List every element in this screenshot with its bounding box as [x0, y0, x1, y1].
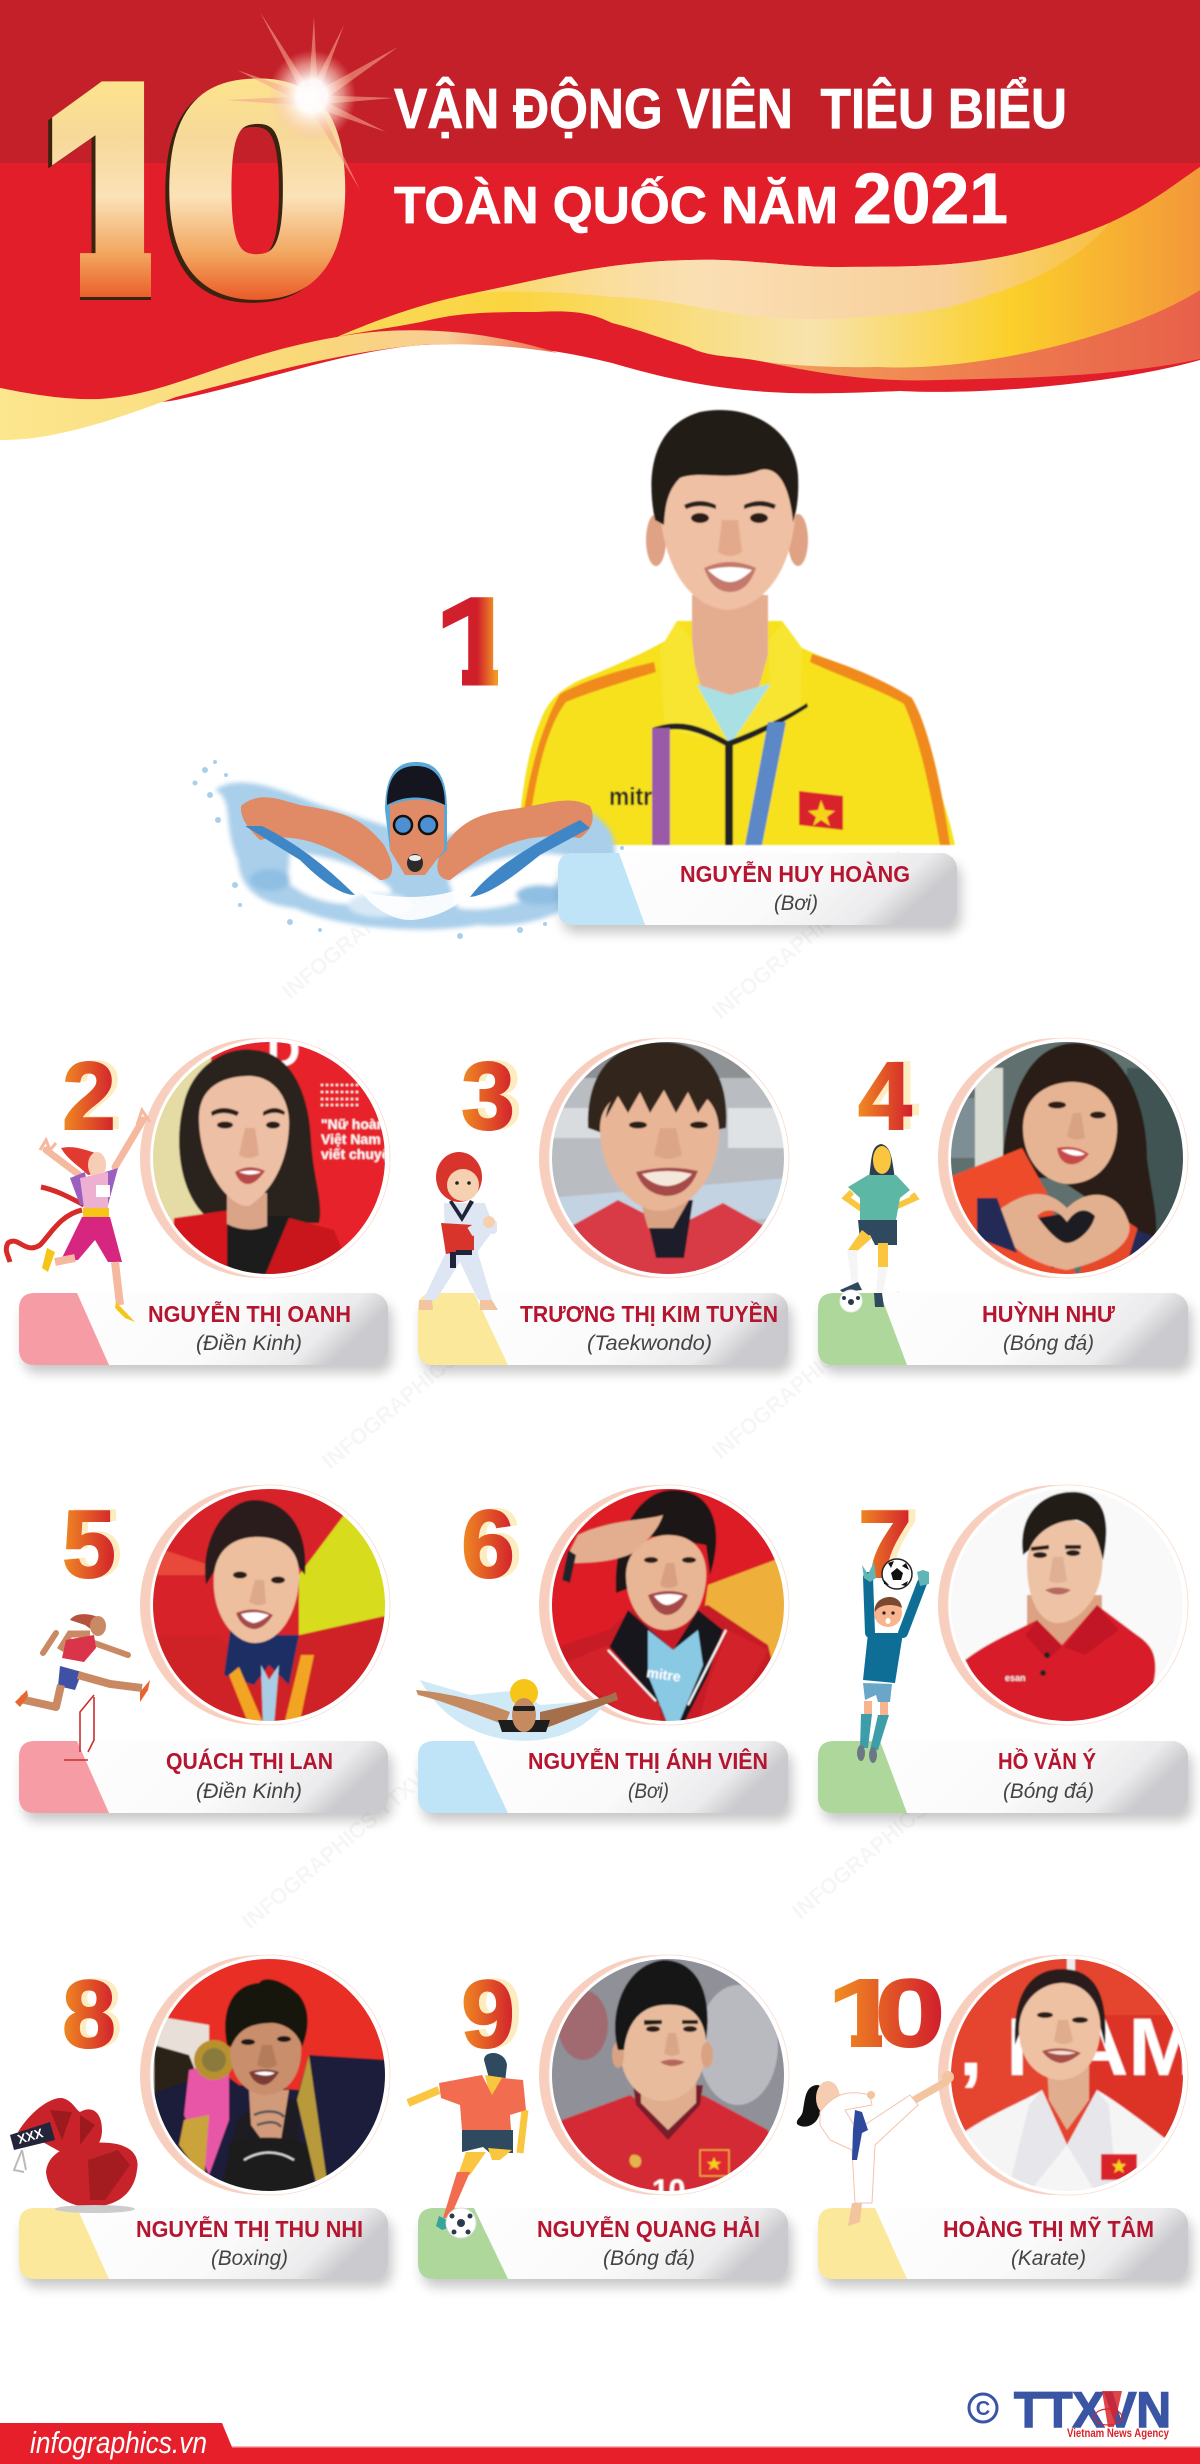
- athlete 4: Huỳnh Như: [818, 1038, 1192, 1373]
- name plate: HUỲNH NHƯ: [982, 1300, 1116, 1327]
- portrait: Nguyễn Thị Ánh Viên: mitre: [646, 1664, 682, 1685]
- number 5: 5: [62, 1491, 116, 1598]
- portrait: Quách Thị Lan: [140, 1485, 390, 1725]
- icon: female runner: [6, 1110, 150, 1322]
- portrait: Nguyễn Thị Ánh Viên: [539, 1485, 789, 1725]
- name plate: (Bóng đá): [1003, 1780, 1094, 1803]
- athlete 2: Nguyễn Thị Oanh: [6, 1024, 398, 1373]
- number 9: 9: [461, 1961, 515, 2068]
- portrait: Hồ Văn Ý: esan: [1005, 1673, 1026, 1683]
- portrait: Nguyễn Thị Oanh: "Nữ hoàng: [321, 1116, 394, 1132]
- name plate: [558, 853, 961, 933]
- text: INFOGRAPHICS TTXVN: [787, 1746, 992, 1924]
- number 4: 4: [865, 1042, 919, 1149]
- header banner: [0, 0, 1200, 440]
- icon: taekwondo athlete: [419, 1152, 498, 1310]
- athlete 1: Nguyễn Huy Hoàng: [192, 410, 961, 939]
- portrait: Nguyễn Quang Hải: 10: [652, 2174, 685, 2207]
- portrait: Trương Thị Kim Tuyền: [539, 1038, 789, 1278]
- name plate: (Boxing): [211, 2247, 288, 2270]
- athlete 3: Trương Thị Kim Tuyền: [418, 1038, 792, 1373]
- icon: butterfly swimmer: [192, 760, 624, 939]
- portrait: Hồ Văn Ý: [938, 1485, 1188, 1725]
- golden ribbon: [337, 167, 1200, 367]
- portrait: Nguyễn Huy Hoàng: mitr: [609, 783, 652, 811]
- footer: infographics.vn: [30, 2425, 207, 2460]
- icon: star burst: [225, 12, 398, 190]
- athlete 6: Nguyễn Thị Ánh Viên: [416, 1485, 792, 1821]
- peach ribbon highlight: [474, 223, 1109, 319]
- athlete 7: Hồ Văn Ý: [818, 1485, 1192, 1821]
- number 2: 2: [68, 1042, 122, 1149]
- portrait: Huỳnh Như: [938, 1038, 1188, 1278]
- portrait: Nguyễn Thị Oanh: viết chuyện: [321, 1146, 398, 1162]
- text: INFOGRAPHICS TTXVN: [317, 1296, 522, 1474]
- number 10: 0: [875, 1960, 945, 2067]
- name plate: TRƯƠNG THỊ KIM TUYỀN: [520, 1300, 778, 1327]
- portrait: Hoàng Thị Mỹ Tâm: , NAM: [959, 2002, 1199, 2093]
- portrait: Nguyễn Thị Oanh: Việt Nam v: [321, 1131, 393, 1147]
- text: INFOGRAPHICS TTXVN: [707, 1286, 912, 1464]
- title: VẬN ĐỘNG VIÊN TIÊU BIỂU: [394, 76, 1067, 141]
- portrait: Nguyễn Quang Hải: [539, 1955, 789, 2207]
- logo: TTXVN copyright: C: [976, 2398, 990, 2420]
- name plate: [19, 1293, 392, 1373]
- banner red background: [0, 0, 1200, 404]
- name plate: HỒ VĂN Ý: [998, 1747, 1096, 1774]
- name plate: [19, 2208, 392, 2287]
- icon: boxing gloves: [10, 2098, 138, 2213]
- text: INFOGRAPHICS TTXVN: [237, 1756, 442, 1934]
- portrait: Nguyễn Thị Oanh: D: [267, 1024, 300, 1076]
- portrait: Nguyễn Thị Thu Nhi: [140, 1955, 390, 2195]
- text: INFOGRAPHICS TTXVN: [707, 846, 912, 1024]
- name plate: NGUYỄN HUY HOÀNG: [680, 859, 910, 887]
- number 3: 3: [461, 1043, 515, 1150]
- icon: karate kick: [797, 2071, 954, 2226]
- name plate: (Taekwondo): [587, 1332, 712, 1355]
- big number 10: 1: [40, 26, 186, 353]
- portrait: Nguyễn Thị Oanh: [140, 1024, 398, 1278]
- name plate: (Bóng đá): [603, 2247, 695, 2270]
- name plate: [818, 1741, 1192, 1821]
- icon: hurdler: [15, 1614, 150, 1760]
- name plate: NGUYỄN THỊ THU NHI: [136, 2214, 363, 2242]
- logo: TTXVN copyright: Vietnam News Agency: [1067, 2426, 1169, 2440]
- number 7: 7: [865, 1490, 919, 1597]
- title: 2021: [853, 160, 1008, 239]
- athlete 5: Quách Thị Lan: [15, 1485, 392, 1821]
- logo: TTXVN copyright: TTXVN: [1014, 2382, 1171, 2438]
- name plate: NGUYỄN THỊ ÁNH VIÊN: [528, 1746, 768, 1774]
- icon: woman footballer: [840, 1144, 915, 1312]
- athlete 9: Nguyễn Quang Hải: [408, 1955, 792, 2287]
- number 10: [834, 1978, 942, 2048]
- footer: [0, 2423, 1200, 2464]
- coral ribbon band: [765, 275, 1200, 380]
- yellow ribbon left: [0, 330, 558, 440]
- name plate: NGUYỄN THỊ OANH: [148, 1299, 351, 1327]
- name plate: (Karate): [1011, 2247, 1086, 2270]
- icon: footballer: [408, 2053, 526, 2238]
- number 6: 6: [461, 1491, 515, 1598]
- number 8: 8: [62, 1961, 116, 2068]
- number 4: 4: [858, 1043, 912, 1150]
- icon: goalkeeper: [857, 1559, 929, 1763]
- number 5: 5: [68, 1490, 122, 1597]
- name plate: QUÁCH THỊ LAN: [166, 1747, 333, 1774]
- number 10: 1: [827, 1960, 902, 2067]
- portrait: Hoàng Thị Mỹ Tâm: [938, 1955, 1199, 2195]
- number 3: 3: [468, 1042, 522, 1149]
- name plate: [818, 2208, 1192, 2287]
- name plate: [818, 1293, 1192, 1373]
- name plate: NGUYỄN QUANG HẢI: [537, 2214, 760, 2242]
- athlete 8: Nguyễn Thị Thu Nhi: [10, 1955, 392, 2287]
- name plate: [418, 1293, 792, 1373]
- big number 10: [48, 78, 346, 303]
- big number 10: 1: [36, 29, 182, 356]
- name plate: (Bơi): [628, 1780, 669, 1803]
- number 9: 9: [468, 1960, 522, 2067]
- name plate: [418, 2208, 792, 2287]
- icon: swimmer with yellow cap: [416, 1679, 618, 1741]
- name plate: [418, 1741, 792, 1821]
- icon: boxing gloves: XXX: [16, 2125, 45, 2147]
- number 1: 1: [434, 573, 520, 711]
- name plate: (Bóng đá): [1003, 1332, 1094, 1355]
- portrait: Nguyễn Huy Hoàng: [517, 410, 955, 845]
- athlete 10: Hoàng Thị Mỹ Tâm: [797, 1955, 1199, 2287]
- number 8: 8: [68, 1960, 122, 2067]
- number 7: 7: [858, 1491, 912, 1598]
- name plate: (Điền Kinh): [196, 1332, 302, 1355]
- text: INFOGRAPHICS TTXVN: [277, 826, 482, 1004]
- number 2: 2: [62, 1043, 116, 1150]
- big number 10: 0: [160, 29, 347, 356]
- name plate: (Bơi): [774, 892, 818, 915]
- name plate: HOÀNG THỊ MỸ TÂM: [943, 2215, 1154, 2242]
- big number 10: 0: [164, 26, 351, 353]
- number 6: 6: [468, 1490, 522, 1597]
- title: TOÀN QUỐC NĂM: [394, 176, 838, 235]
- title: [394, 76, 1067, 239]
- name plate: (Điền Kinh): [196, 1780, 302, 1803]
- name plate: [19, 1741, 392, 1821]
